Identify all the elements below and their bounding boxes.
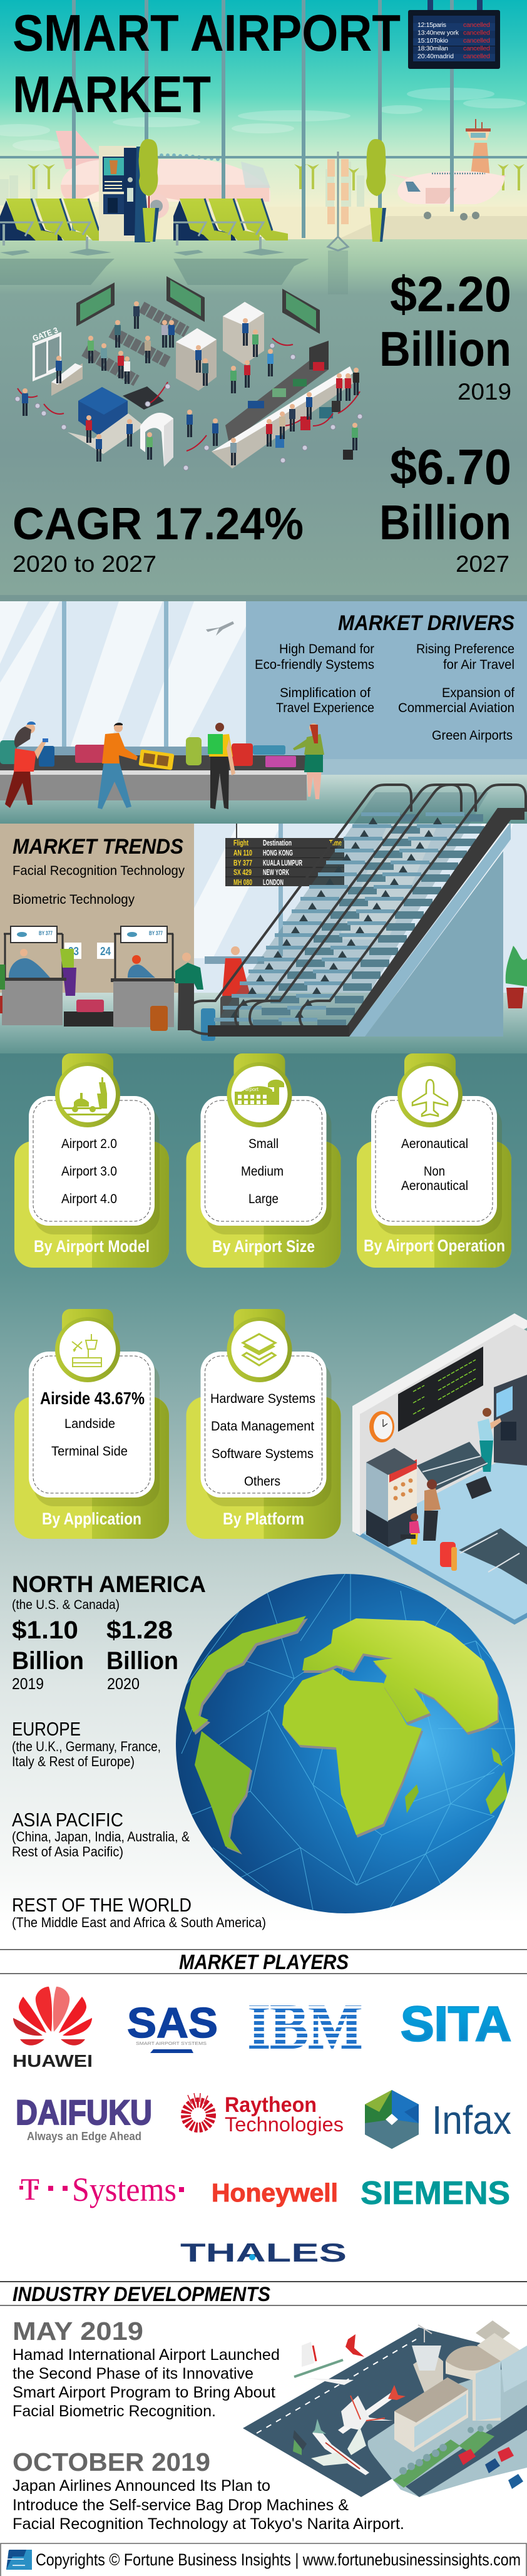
regional text: north america: 2019 (12, 1675, 44, 1693)
development: May 2019: the Second Phase of its Innovative (13, 2365, 253, 2382)
logo: Raytheon Technologies: Raytheon (225, 2093, 317, 2117)
regional text: europe: EUROPE (12, 1718, 81, 1740)
label: by platform: By Platform (223, 1509, 304, 1528)
icon: gate door: GATE 3 (31, 325, 59, 343)
text: market trends list: Facial Recognition Technology (13, 863, 185, 878)
panel: market trends scene (0, 785, 527, 1053)
text: market drivers list: Eco-friendly Systems (255, 657, 374, 672)
check-in counters: 23 (68, 945, 79, 958)
text: airport model list: Airport 3.0 (61, 1164, 117, 1179)
illustration: isometric airport lounge (352, 1313, 527, 1625)
text: platform list: Hardware Systems (210, 1392, 315, 1406)
logo: T-Systems: T (21, 2171, 39, 2206)
regional text: north america: (the U.S. & Canada) (12, 1598, 120, 1612)
text: market drivers list (255, 641, 514, 743)
metal detector arch (140, 413, 173, 467)
check-in counters: BY 377 (39, 930, 53, 936)
visitors (409, 1479, 441, 1544)
flight information board: KUALA LUMPUR (263, 859, 302, 867)
regional text: europe: Italy & Rest of Europe) (12, 1754, 135, 1769)
service booths (51, 302, 264, 396)
label: by application: By Application (42, 1509, 141, 1528)
flight information board: AN 110 (233, 849, 252, 857)
market size 2019 (379, 266, 511, 405)
text: market drivers list: Commercial Aviation (398, 700, 514, 715)
person: staff in green (293, 723, 324, 799)
globe (176, 1566, 519, 1913)
regional text: europe (12, 1718, 161, 1769)
regional text: rest of the world (12, 1894, 266, 1930)
flight information board: HONG KONG (263, 849, 293, 857)
development: October 2019: Japan Airlines Announced Its Plan to (13, 2477, 270, 2495)
development: May 2019: MAY 2019 (13, 2317, 143, 2346)
logo: Siemens: SIEMENS (361, 2175, 510, 2211)
development: May 2019: Smart Airport Program to Bring About (13, 2384, 275, 2401)
icon: airplane and tower (63, 1077, 108, 1115)
development: May 2019: Hamad International Airport Launched (13, 2346, 280, 2364)
logo: Thales (180, 2238, 347, 2267)
footer (1, 2543, 526, 2576)
illustration: palm trees (28, 164, 524, 190)
text: platform list: Others (244, 1474, 280, 1489)
text: market drivers list: Expansion of (442, 685, 514, 700)
rope barriers (18, 338, 360, 451)
icon: plane (412, 1080, 448, 1116)
text: market drivers list: High Demand for (279, 641, 374, 656)
CAGR (13, 499, 304, 577)
segment section background (0, 1053, 527, 1932)
regional text: north america: 2020 (107, 1675, 140, 1693)
market size 2027: $6.70 (390, 439, 511, 495)
text: market drivers list: for Air Travel (443, 657, 514, 672)
text: market trends list: Biometric Technology (13, 892, 135, 907)
logo: Raytheon Technologies: Technologies (225, 2113, 344, 2136)
development: October 2019 (13, 2448, 404, 2533)
ticket kiosk (494, 1375, 527, 1466)
panel: by airport model (14, 1053, 169, 1268)
logo: Daifuku: DAIFUKU (16, 2092, 152, 2132)
icon: stacked layers (243, 1334, 275, 1365)
regional text: north america: Billion (12, 1647, 84, 1675)
illustration: potted plant right (366, 139, 386, 242)
development: May 2019 (13, 2317, 280, 2420)
title: SMART AIRPORT (13, 4, 401, 62)
title: MARKET (13, 65, 211, 123)
illustration: sign stand (327, 152, 349, 251)
regional text: asia pacific: Rest of Asia Pacific) (12, 1844, 123, 1860)
flight status board: cancelled (463, 45, 490, 53)
illustration: escalators (185, 785, 526, 1037)
clock (369, 1411, 394, 1442)
text: airport operation list: Aeronautical (401, 1179, 468, 1193)
regional text: europe: (the U.K., Germany, France, (12, 1739, 161, 1754)
text: market drivers list: Travel Experience (276, 700, 374, 715)
icon: gate door (31, 325, 61, 381)
flight status board: cancelled (463, 53, 490, 60)
logo: Infax (365, 2090, 511, 2149)
logo: SAS: SMART AIRPORT SYSTEMS (136, 2041, 207, 2046)
window frame bars (0, 0, 527, 238)
regional text: rest of the world: (The Middle East and Africa & South America) (12, 1915, 266, 1930)
passengers and staff (22, 301, 359, 465)
development: May 2019: Facial Biometric Recognition. (13, 2403, 216, 2420)
text: application list: Landside (64, 1417, 115, 1431)
text: airport operation list (401, 1137, 468, 1193)
seats (417, 1442, 492, 1499)
market size 2019: 2019 (458, 379, 511, 405)
text: market trends list (13, 863, 185, 907)
icon: terminal building: Airport (243, 1087, 259, 1092)
text: airport size list (241, 1137, 284, 1206)
icon: tower and plane (72, 1334, 101, 1367)
text: application list (40, 1389, 145, 1459)
baggage belt and counter (212, 341, 353, 468)
flight status board: cancelled (463, 29, 490, 36)
flight information board: NEW YORK (263, 868, 289, 877)
flight status board: 15:10Tokio (417, 37, 448, 44)
label: by airport size: By Airport Size (212, 1237, 315, 1256)
second seats and luggage (401, 1528, 527, 1585)
logo: SITA: SITA (401, 1996, 511, 2051)
logo: SAS: SAS (127, 1999, 218, 2047)
heading: market drivers: MARKET DRIVERS (338, 611, 514, 635)
flight status board: 18:30milan (417, 45, 448, 53)
flight status board (408, 0, 500, 69)
logo: Thales: THALES (180, 2238, 347, 2267)
illustration: floor reflections (0, 251, 348, 294)
regional text: north america: NORTH AMERICA (12, 1571, 206, 1597)
text: platform list: Data Management (211, 1419, 314, 1434)
regional text: north america: $1.10 (12, 1616, 78, 1644)
logo: Huawei (13, 1987, 93, 2071)
regional text: asia pacific: ASIA PACIFIC (12, 1809, 123, 1831)
text: airport model list: Airport 2.0 (61, 1137, 117, 1151)
illustration: seat row right (173, 199, 288, 256)
label: by airport model: By Airport Model (34, 1237, 150, 1256)
illustration: seat row left (0, 199, 115, 256)
development: October 2019: OCTOBER 2019 (13, 2448, 210, 2476)
development: October 2019: Facial Recognition Technology at Tokyo's Narita Airport. (13, 2515, 404, 2533)
hero section: airport terminal background (0, 0, 527, 601)
icon: terminal building (235, 1080, 284, 1105)
text: airport size list: Small (248, 1137, 279, 1151)
regional text: north america (12, 1571, 206, 1693)
text: market drivers list: Green Airports (432, 728, 513, 743)
airport buildings (394, 2320, 527, 2452)
panel: by application (14, 1309, 169, 1539)
person: traveller with backpack (208, 723, 235, 809)
logo: Honeywell: Honeywell (212, 2178, 338, 2207)
market size 2027: Billion (379, 495, 511, 550)
seat rows (84, 307, 187, 381)
regional text: north america: Billion (106, 1647, 178, 1675)
heading: market trends: MARKET TRENDS (13, 835, 183, 859)
logo: T-Systems: Systems (72, 2171, 177, 2208)
text: airport model list (61, 1137, 117, 1206)
illustration: isometric airport (243, 2320, 527, 2497)
logo: IBM: IBM (248, 1992, 362, 2062)
illustration: control tower (466, 119, 491, 186)
flight information board: Time (329, 839, 342, 847)
icon: display screens (76, 276, 320, 334)
regional text: asia pacific: (China, Japan, India, Australia, & (12, 1829, 190, 1844)
flight status board: 12:15paris (417, 21, 446, 29)
text: airport model list: Airport 4.0 (61, 1192, 117, 1206)
label: by airport operation: By Airport Operation (364, 1236, 505, 1255)
illustration: potted plant left (139, 139, 159, 242)
text: market drivers list: Rising Preference (416, 641, 514, 656)
illustration: large pink aircraft (56, 131, 270, 219)
logo: T-Systems (19, 2171, 184, 2208)
text: market drivers list: Simplification of (280, 685, 371, 700)
illustration: vending machine (99, 146, 150, 242)
illustration: small pink aircraft (390, 171, 506, 220)
luggage on carousel (0, 737, 296, 770)
flight information board: MH 080 (233, 878, 252, 887)
regional text: rest of the world: REST OF THE WORLD (12, 1894, 192, 1916)
panel: market drivers scene (0, 595, 527, 824)
person: woman at carousel (5, 722, 48, 808)
text: airport operation list: Aeronautical (401, 1137, 468, 1151)
flight status board: 20:40madrid (417, 53, 454, 60)
text: platform list: Software Systems (212, 1447, 314, 1461)
flight display (398, 1347, 483, 1432)
check-in counters: 24 (100, 945, 111, 958)
logo: Raytheon Technologies (186, 2093, 344, 2136)
panel: by airport size (187, 1053, 340, 1268)
flight information board (225, 824, 344, 887)
donut vending machine (366, 1448, 417, 1547)
market size 2027: 2027 (456, 551, 509, 577)
isometric terminal illustration (15, 276, 362, 470)
text: application list: Airside 43.67% (40, 1389, 145, 1408)
text: airport size list: Large (248, 1192, 279, 1206)
flight information board: BY 377 (233, 859, 252, 867)
text: airport operation list: Non (424, 1164, 445, 1179)
logo: Huawei: HUAWEI (13, 2051, 93, 2071)
panel: market players header (0, 1932, 527, 2292)
icon: Fortune Business Insights logo (6, 2550, 32, 2570)
CAGR: 2020 to 2027 (13, 551, 156, 577)
panel: industry developments header: INDUSTRY DEVELOPMENTS (13, 2283, 271, 2305)
logo: Infax: Infax (432, 2098, 511, 2143)
panel: market players header: MARKET PLAYERS (179, 1950, 349, 1973)
person: man with yellow suitcase (98, 723, 138, 809)
text: application list: Terminal Side (51, 1444, 128, 1459)
flight information board: Destination (263, 839, 292, 847)
aircraft on tarmac (293, 2334, 406, 2475)
market size 2019: Billion (379, 321, 511, 376)
text: airport size list: Medium (241, 1164, 284, 1179)
check-in counters: BY 377 (149, 930, 163, 936)
flight status board: cancelled (463, 21, 490, 29)
flight information board: LONDON (263, 878, 284, 887)
text: platform list (210, 1392, 315, 1489)
flight status board: cancelled (463, 37, 490, 44)
flight information board: SX 429 (233, 868, 252, 877)
person at kiosk (478, 1408, 501, 1472)
flight status board: 13:40new york (417, 29, 459, 36)
market size 2019: $2.20 (390, 266, 511, 322)
panel: by platform (187, 1309, 340, 1539)
title (13, 4, 401, 123)
icon: plant (506, 946, 527, 1008)
cars (458, 2447, 523, 2489)
check-in counters (0, 926, 250, 1041)
regional text: asia pacific (12, 1809, 190, 1860)
development: October 2019: Introduce the Self-service Bag Drop Machines & (13, 2496, 349, 2514)
security screening (68, 386, 164, 454)
market size 2027 (379, 439, 511, 577)
CAGR: CAGR 17.24% (13, 499, 304, 549)
logo: Daifuku: Always an Edge Ahead (27, 2130, 141, 2143)
panel: by airport operation (357, 1053, 511, 1268)
regional text: north america: $1.28 (106, 1616, 173, 1644)
flight information board: Flight (233, 839, 249, 847)
